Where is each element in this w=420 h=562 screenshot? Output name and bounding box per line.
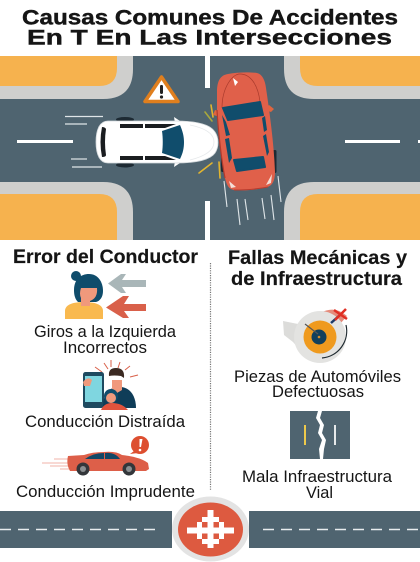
road surface bbox=[0, 56, 420, 240]
lane markings bbox=[17, 56, 420, 240]
text: Mala Infraestructura Vial bbox=[242, 468, 393, 502]
text: Conducción Imprudente: Conducción Imprudente bbox=[16, 483, 195, 501]
title: En T En Las Intersecciones bbox=[27, 26, 392, 50]
bottom road band bbox=[0, 511, 420, 548]
text: Conducción Distraída: Conducción Distraída bbox=[25, 413, 186, 431]
icon: defective brake disc bbox=[283, 309, 347, 363]
heading: Error del Conductor: Error del Conductor bbox=[13, 246, 198, 268]
text: Mala Infraestructura Vial: Mala Infraestructura bbox=[242, 468, 393, 486]
motion lines: white car bbox=[65, 116, 103, 167]
heading: Fallas Mecánicas y de Infraestructura bbox=[228, 247, 407, 290]
column divider bbox=[210, 263, 212, 490]
icon: warning triangle bbox=[145, 77, 178, 102]
crash sparks bbox=[199, 105, 220, 178]
title: Causas Comunes De Accidentes bbox=[22, 6, 398, 30]
text: Piezas de Automóviles Defectuosas: Defectuosas bbox=[272, 383, 364, 401]
icon: cracked road bbox=[290, 411, 350, 459]
text: Giros a la Izquierda Incorrectos: Incorrectos bbox=[63, 339, 147, 357]
corner: top right bbox=[284, 56, 420, 99]
text: Giros a la Izquierda Incorrectos: Giros a la Izquierda bbox=[34, 323, 177, 341]
red car bbox=[213, 72, 276, 190]
icon: driver turning left bbox=[65, 271, 146, 319]
text: Piezas de Automóviles Defectuosas: Piezas de Automóviles bbox=[234, 368, 401, 386]
icon: intersection badge bbox=[172, 496, 249, 562]
heading: Fallas Mecánicas y de Infraestructura: Fallas Mecánicas y bbox=[228, 247, 407, 269]
corner: top left bbox=[0, 56, 133, 99]
text: Giros a la Izquierda Incorrectos bbox=[34, 323, 177, 357]
icon: distracted driver with phone bbox=[83, 360, 138, 410]
intersection illustration bbox=[0, 56, 420, 240]
title bbox=[22, 6, 398, 50]
corner: bottom right bbox=[284, 182, 420, 240]
white car bbox=[96, 117, 218, 168]
heading: Fallas Mecánicas y de Infraestructura: de Infraestructura bbox=[231, 268, 402, 290]
icon: speeding car bbox=[42, 436, 149, 476]
text: Piezas de Automóviles Defectuosas bbox=[234, 368, 401, 401]
corner: bottom left bbox=[0, 182, 133, 240]
text: Mala Infraestructura Vial: Vial bbox=[306, 484, 333, 502]
motion lines: red car bbox=[224, 176, 281, 225]
